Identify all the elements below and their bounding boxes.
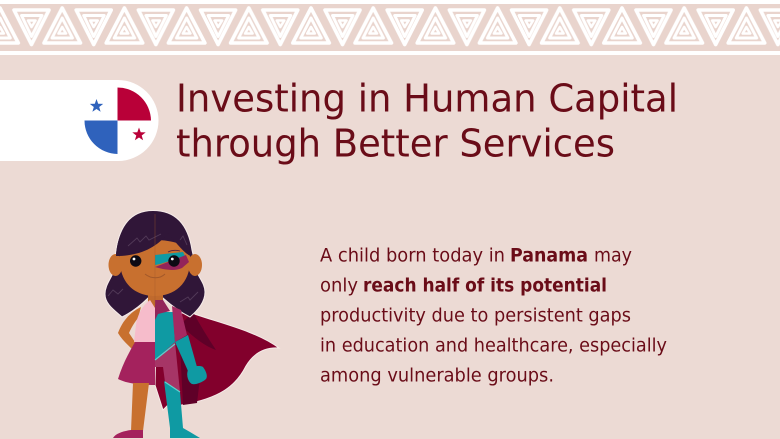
pink shirt	[134, 300, 155, 342]
face	[120, 240, 190, 296]
left leg	[131, 383, 149, 431]
body text: A child born today in	[320, 245, 505, 266]
right leg	[164, 381, 200, 438]
right eye	[168, 255, 180, 267]
body text: among vulnerable groups.	[320, 365, 554, 386]
teal top	[155, 310, 175, 362]
decorative triangle band	[0, 0, 780, 55]
armor stripe	[155, 344, 175, 360]
body text	[320, 245, 667, 386]
title: Investing in Human Capital	[176, 76, 678, 122]
icon: blue star	[90, 99, 103, 112]
icon: red star	[132, 128, 146, 140]
body text: may	[594, 245, 632, 266]
fist	[187, 366, 207, 384]
magenta armor skirt	[155, 342, 180, 392]
hair	[105, 210, 205, 317]
brow	[168, 250, 180, 252]
magenta collar	[155, 300, 170, 320]
body text: Panama	[510, 245, 588, 266]
icon: flag red quadrant	[118, 87, 151, 120]
illustration: child superhero	[105, 210, 279, 438]
title	[176, 76, 678, 166]
left shoe	[113, 430, 143, 438]
body text: productivity due to persistent gaps	[320, 305, 631, 326]
body text: only	[320, 275, 358, 296]
fringe	[116, 214, 191, 256]
mask	[155, 252, 185, 265]
left eye	[130, 255, 141, 267]
body text: in education and healthcare, especially	[320, 335, 667, 356]
leg stripe	[165, 382, 180, 392]
ears	[108, 254, 202, 276]
left arm	[118, 307, 141, 350]
icon: flag blue quadrant	[84, 120, 118, 154]
flag badge: Panama	[0, 80, 158, 161]
hair highlights	[108, 234, 198, 302]
title: through Better Services	[176, 122, 615, 166]
magenta skirt	[118, 342, 155, 385]
sash	[172, 306, 187, 342]
right arm	[175, 335, 197, 371]
body text: reach half of its potential	[363, 275, 607, 296]
neck	[148, 292, 163, 310]
smile	[145, 274, 165, 278]
centre seam	[154, 214, 156, 305]
cape	[155, 311, 279, 410]
